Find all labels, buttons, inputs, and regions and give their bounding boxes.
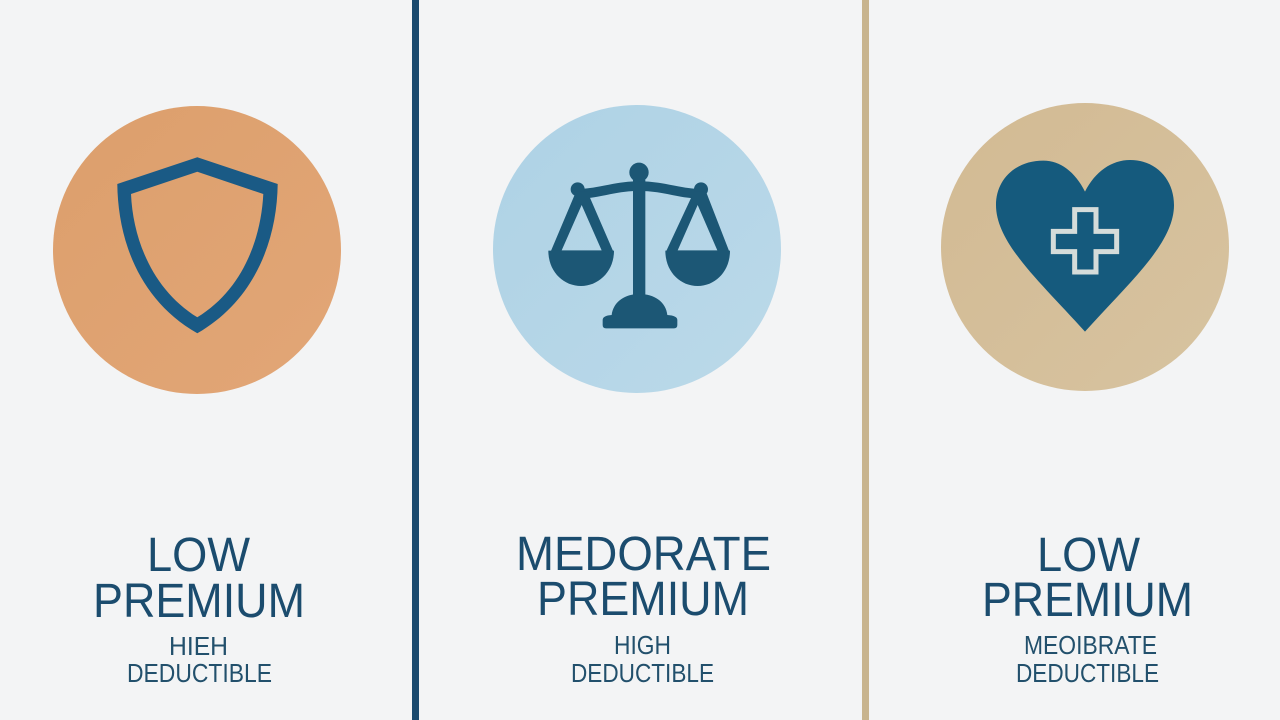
divider: navy [412,0,419,720]
text: high deductible [571,632,714,688]
heading: low premium [93,529,305,628]
text: moderate deductible [1016,632,1159,688]
text: moderate deductible: DEDUCTIBLE [1016,660,1159,688]
text: high deductible: HIEH [169,633,228,661]
panel: moderate premium, high deductible [493,105,781,688]
heading: low premium: LOW [1037,529,1141,582]
icon: shield [117,157,278,333]
text: high deductible [127,633,272,688]
panel: low premium, high deductible [53,106,341,688]
circle: tan [941,103,1229,391]
circle: light blue [493,105,781,393]
icon: heart with medical cross [996,160,1174,332]
heading: low premium [982,529,1193,627]
heading: low premium: PREMIUM [93,575,305,628]
heading: low premium: PREMIUM [982,574,1193,627]
text: high deductible: DEDUCTIBLE [571,660,714,688]
circle: orange [53,106,341,394]
panel: low premium, moderate deductible [941,103,1229,688]
text: high deductible: DEDUCTIBLE [127,660,272,688]
text: moderate deductible: MEOIBRATE [1024,632,1157,660]
heading: moderate premium [516,528,771,626]
heading: moderate premium: PREMIUM [537,573,749,626]
heading: low premium: LOW [147,529,251,582]
text: high deductible: HIGH [614,632,671,660]
divider: tan [862,0,869,720]
heading: moderate premium: MEDORATE [516,528,771,581]
icon: balance scales [548,163,730,328]
